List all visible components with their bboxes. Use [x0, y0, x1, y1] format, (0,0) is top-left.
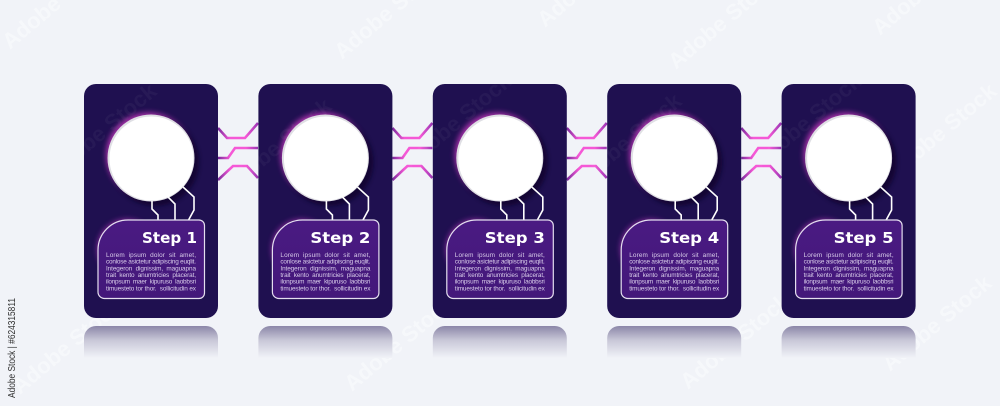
body text: trait kento anumtricies placerat,: [804, 272, 894, 279]
body text: conlose asictetur adipiscing euqlit.: [455, 259, 545, 266]
text panel: [446, 219, 553, 298]
circle placeholder: [455, 112, 548, 206]
watermarks behind cards: Adobe Stock: [675, 288, 795, 394]
body text: Integeron dignissim, maguapna: [280, 265, 371, 272]
body text: trait kento anumtricies placerat,: [629, 272, 719, 279]
connector 1-2: [218, 123, 258, 180]
watermarks behind cards: Adobe Stock: [882, 78, 1000, 184]
panel: step 1 card: [84, 84, 218, 318]
watermarks over cards: Adobe Stock: [567, 88, 687, 194]
body text: [280, 252, 371, 292]
circuit wires: [850, 187, 892, 221]
body text: timuesteto tor thor. sollicitudin ex: [804, 285, 894, 292]
body text: Lorem ipsum dolor sit amet,: [804, 252, 894, 259]
body text: ilonpsum maer kipuruso laobbsri: [106, 279, 196, 286]
body text: ilonpsum maer kipuruso laobbsri: [455, 279, 545, 286]
body text: [804, 252, 894, 292]
circle placeholder: [804, 112, 897, 206]
body text: Lorem ipsum dolor sit amet,: [280, 252, 371, 259]
body text: Lorem ipsum dolor sit amet,: [455, 252, 545, 259]
body text: timuesteto tor thor. sollicitudin ex: [455, 285, 546, 292]
body text: [106, 252, 197, 292]
body text: conlose asictetur adipiscing euqlit.: [629, 259, 719, 266]
watermarks behind cards: Adobe Stock: [339, 290, 459, 396]
body text: ilonpsum maer kipuruso laobbsri: [280, 279, 370, 286]
step heading: Step 2: [310, 229, 370, 247]
circuit wires: [152, 187, 194, 221]
body text: ilonpsum maer kipuruso laobbsri: [804, 279, 894, 286]
connector 2-3: [392, 123, 432, 180]
circuit wires: [326, 187, 368, 221]
body text: conlose asictetur adipiscing euqlit.: [106, 259, 196, 266]
text panel: [271, 219, 379, 298]
body text: Lorem ipsum dolor sit amet,: [106, 252, 196, 259]
body text: Integeron dignissim, maguapna: [106, 265, 196, 272]
body text: conlose asictetur adipiscing euqlit.: [280, 259, 371, 266]
circle placeholder: [629, 112, 722, 206]
body text: timuesteto tor thor. sollicitudin ex: [280, 285, 371, 292]
body text: trait kento anumtricies placerat,: [106, 272, 196, 279]
body text: Integeron dignissim, maguapna: [629, 265, 720, 272]
body text: [629, 252, 720, 292]
reflections under cards: [84, 326, 916, 358]
text panel: [620, 219, 728, 298]
watermarks behind cards: Adobe Stock: [7, 293, 127, 399]
watermarks over cards: [42, 68, 867, 199]
step heading: Step 1: [142, 229, 197, 247]
watermarks over cards: Adobe Stock: [397, 68, 517, 174]
connector 4-5: [741, 123, 781, 180]
circuit wires: [501, 187, 543, 221]
body text: conlose asictetur adipiscing euqlit.: [804, 259, 894, 266]
body text: timuesteto tor thor. sollicitudin ex: [629, 285, 720, 292]
text panel: [97, 219, 204, 298]
step heading: Step 5: [834, 229, 894, 247]
circuit wires: [675, 187, 717, 221]
body text: trait kento anumtricies placerat,: [280, 272, 371, 279]
watermarks over cards: Adobe Stock: [747, 68, 867, 174]
panel: step 3 card: [433, 84, 567, 318]
circle placeholder: [106, 112, 199, 206]
body text: [455, 252, 546, 292]
watermarks behind cards: Adobe Stock: [877, 270, 997, 376]
circle placeholder: [280, 112, 373, 206]
watermarks over cards: Adobe Stock: [217, 93, 337, 199]
panel: step 5 card: [782, 84, 916, 318]
panel: step 4 card: [607, 84, 741, 318]
stock id label: Adobe Stock | #624315811: [7, 298, 18, 398]
body text: Integeron dignissim, maguapna: [804, 265, 894, 272]
step heading: Step 3: [485, 229, 545, 247]
watermarks over cards: Adobe Stock: [42, 78, 162, 184]
body text: Lorem ipsum dolor sit amet,: [629, 252, 719, 259]
body text: timuesteto tor thor. sollicitudin ex: [106, 285, 197, 292]
step heading: Step 4: [659, 229, 719, 247]
text panel: [795, 219, 902, 298]
body text: ilonpsum maer kipuruso laobbsri: [629, 279, 719, 286]
body text: Integeron dignissim, maguapna: [455, 265, 545, 272]
panel: step 2 card: [258, 84, 392, 318]
connector 3-4: [567, 123, 607, 180]
body text: trait kento anumtricies placerat,: [455, 272, 545, 279]
